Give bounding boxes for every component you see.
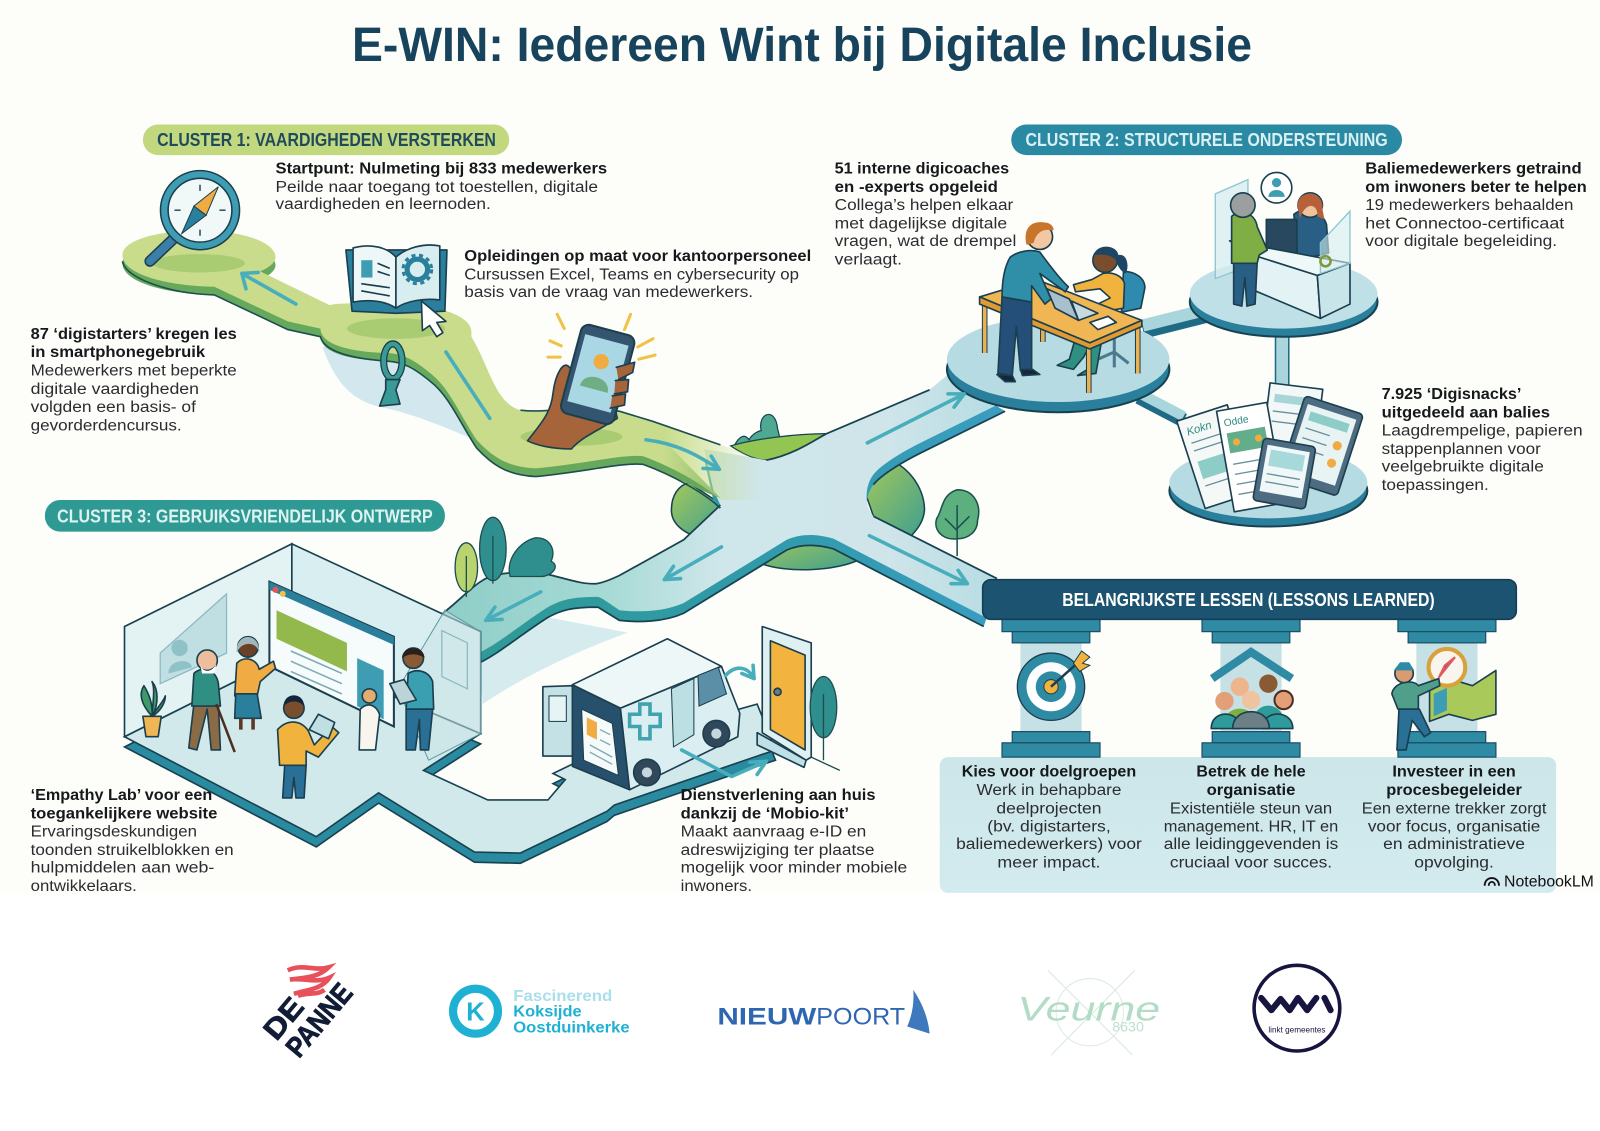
logo: De Panne: DE: [257, 991, 311, 1046]
logo: WVI: [1254, 965, 1340, 1051]
lesson 1 text: meer impact.: [997, 854, 1101, 871]
title: E-WIN: Iedereen Wint bij Digitale Inclusie: [352, 19, 1252, 72]
lesson 1 text: (bv. digistarters,: [987, 819, 1111, 836]
illustration: empathy lab: [125, 544, 776, 863]
illustration: digisnack papers and tablets: Odde: [1223, 414, 1250, 429]
icon: team under roof: [1211, 652, 1293, 729]
lesson 2 text: management. HR, IT en: [1164, 819, 1338, 836]
lesson 1 text: deelprojecten: [996, 800, 1102, 817]
green hills behind the crossroads: [671, 414, 924, 570]
text block: empathy lab: ‘Empathy Lab’ voor een: [31, 787, 212, 804]
cluster 3 heading: [45, 500, 445, 532]
icon: ring knot: [380, 344, 402, 406]
trees near the empathy lab: [455, 517, 555, 597]
text block: empathy lab: Ervaringsdeskundigen: [31, 824, 197, 841]
text block: digistarters: Medewerkers met beperkte: [31, 363, 237, 380]
person: small woman at screen: [359, 689, 380, 750]
cluster 1 heading: [143, 124, 509, 155]
shadow under green road: [322, 347, 500, 451]
text block: baliemedewerkers: het Connectoo-certificaat: [1365, 216, 1565, 233]
text block: digicoaches: vragen, wat de drempel: [835, 233, 1016, 250]
illustration: front door with tree: [757, 627, 840, 770]
text block: mobio-kit: adreswijziging ter plaatse: [681, 842, 875, 859]
website screen: [269, 582, 394, 727]
text block: digisnacks: stappenplannen voor: [1382, 441, 1541, 458]
logo: Nieuwpoort: NIEUW: [717, 1003, 817, 1030]
text block: digicoaches: met dagelijkse digitale: [835, 216, 1007, 233]
text block: digicoaches: [835, 160, 1016, 268]
text block: baliemedewerkers: [1365, 160, 1587, 250]
desk: [980, 280, 1142, 393]
text block: digicoaches: 51 interne digicoaches: [835, 160, 1009, 177]
lesson 1 text: baliemedewerkers) voor: [956, 836, 1142, 853]
lab walls: [125, 544, 481, 760]
text block: opleidingen op maat: Cursussen Excel, Teams en cybersecurity op: [464, 267, 799, 284]
lessons heading bar: [983, 580, 1516, 619]
lesson 3 text: en administratieve: [1383, 836, 1525, 853]
lesson 2 text: Existentiële steun van: [1170, 800, 1332, 817]
text block: opleidingen op maat: Opleidingen op maat voor kantoorpersoneel: [464, 248, 811, 265]
lesson 3 text: opvolging.: [1414, 854, 1494, 871]
icon: guide with compass and map: [1392, 649, 1496, 750]
pillars: [1002, 619, 1496, 757]
text block: baliemedewerkers: voor digitale begeleiding.: [1365, 233, 1557, 250]
text block: digistarters: gevorderdencursus.: [31, 418, 182, 435]
illustration: Mobio-kit van: [543, 639, 766, 790]
background: [0, 0, 1600, 893]
logo: Koksijde Oostduinkerke: Koksijde: [513, 1003, 582, 1020]
platforms: cluster 2: [947, 259, 1378, 527]
lab floor: [125, 653, 776, 863]
lesson 2 text: alle leidinggevenden is: [1164, 836, 1338, 853]
lesson 1 text: [956, 764, 1142, 871]
logo: Nieuwpoort: POORT: [816, 1003, 905, 1030]
icon: compass magnifier: [150, 174, 236, 261]
lesson 3 text: [1362, 764, 1547, 871]
logo: Koksijde Oostduinkerke: K: [466, 998, 485, 1026]
text block: digicoaches: en -experts opgeleid: [835, 179, 998, 196]
text block: startpunt nulmeting: Peilde naar toegang tot toestellen, digitale: [276, 179, 598, 196]
central crossroads road: [443, 369, 1005, 663]
text block: digistarters: 87 ‘digistarters’ kregen les: [31, 326, 237, 343]
person: man with tablet: [390, 648, 434, 750]
lesson 3 text: voor focus, organisatie: [1368, 819, 1541, 836]
logo: Veurne 8630: Veurne: [1017, 990, 1160, 1028]
seated woman: [1057, 247, 1128, 376]
cluster 2 heading: [1011, 124, 1402, 155]
text block: baliemedewerkers: 19 medewerkers behaalden: [1365, 197, 1573, 214]
person: elder with cane: [189, 650, 235, 752]
cluster 3 heading: CLUSTER 3: GEBRUIKSVRIENDELIJK ONTWERP: [57, 505, 433, 526]
text block: digistarters: in smartphonegebruik: [31, 344, 205, 361]
text block: digicoaches: verlaagt.: [835, 251, 902, 268]
text block: digistarters: digitale vaardigheden: [31, 381, 199, 398]
person: woman in yellow: [235, 637, 276, 730]
text block: empathy lab: toegankelijkere website: [31, 805, 218, 822]
logo: De Panne: PANNE: [280, 977, 359, 1064]
lesson 3 text: Investeer in een: [1392, 764, 1516, 781]
logo: Koksijde Oostduinkerke: Fascinerend: [513, 988, 612, 1005]
text block: startpunt nulmeting: Startpunt: Nulmeting bij 833 medewerkers: [276, 160, 607, 177]
text block: digisnacks: veelgebruikte digitale: [1382, 458, 1544, 475]
logo: Veurne 8630: [1017, 970, 1160, 1055]
logo: Koksijde Oostduinkerke: [453, 988, 630, 1037]
lesson 3 text: procesbegeleider: [1386, 782, 1522, 799]
text block: mobio-kit: inwoners.: [681, 878, 752, 895]
text block: empathy lab: hulpmiddelen aan web-: [31, 859, 214, 876]
watermark: NotebookLM: NotebookLM: [1504, 874, 1594, 891]
lesson 1 text: Kies voor doelgroepen: [962, 764, 1136, 781]
text block: digistarters: volgden een basis- of: [31, 399, 197, 416]
text block: digisnacks: uitgedeeld aan balies: [1382, 404, 1550, 421]
cluster 2 heading: CLUSTER 2: STRUCTURELE ONDERSTEUNING: [1026, 129, 1388, 150]
illustration: digisnack papers and tablets: Kokn: [1185, 419, 1213, 439]
lessons text panel: [940, 757, 1556, 893]
text block: digistarters: [31, 326, 237, 435]
cluster 1 heading: CLUSTER 1: VAARDIGHEDEN VERSTERKEN: [157, 129, 496, 150]
plant: [141, 682, 165, 737]
shadow under teal road: [479, 617, 628, 704]
text block: empathy lab: ontwikkelaars.: [31, 878, 137, 895]
green road: cluster 1 path: [122, 231, 766, 508]
panel: lessons learned: [940, 580, 1556, 893]
icon: open book with gear and cursor: [346, 245, 447, 337]
lessons heading bar: BELANGRIJKSTE LESSEN (LESSONS LEARNED): [1062, 589, 1435, 610]
logo: Koksijde Oostduinkerke: Oostduinkerke: [513, 1020, 630, 1037]
text block: empathy lab: [31, 787, 234, 895]
text block: baliemedewerkers: om inwoners beter te helpen: [1365, 179, 1587, 196]
text block: startpunt nulmeting: vaardigheden en leernoden.: [276, 196, 491, 213]
text block: startpunt nulmeting: [276, 160, 607, 213]
text block: digisnacks: Laagdrempelige, papieren: [1382, 423, 1583, 440]
text block: digisnacks: toepassingen.: [1382, 477, 1489, 494]
text block: mobio-kit: mogelijk voor minder mobiele: [681, 859, 907, 876]
text block: baliemedewerkers: Baliemedewerkers getraind: [1365, 160, 1582, 177]
text block: digisnacks: [1382, 386, 1583, 494]
lesson 1 text: Werk in behapbare: [977, 782, 1122, 799]
person: man with laptop: [278, 695, 339, 798]
icon: hand holding phone: [528, 314, 655, 449]
icon: target with arrow: [1017, 651, 1090, 720]
lesson 2 text: organisatie: [1207, 782, 1296, 799]
text block: opleidingen op maat: [464, 248, 811, 301]
text block: mobio-kit: Maakt aanvraag e-ID en: [681, 824, 866, 841]
lesson 2 text: Betrek de hele: [1196, 764, 1306, 781]
text block: mobio-kit: dankzij de ‘Mobio-kit’: [681, 805, 849, 822]
tree beside the crossroads: [936, 490, 979, 556]
text block: mobio-kit: Dienstverlening aan huis: [681, 787, 876, 804]
text block: digicoaches: Collega’s helpen elkaar: [835, 197, 1013, 214]
lesson 2 text: [1164, 764, 1338, 871]
illustration: coach helping colleague at desk: [980, 222, 1145, 393]
illustration: digisnack papers and tablets: [1177, 383, 1363, 512]
logo: Nieuwpoort: [717, 990, 930, 1034]
text block: digisnacks: 7.925 ‘Digisnacks’: [1382, 386, 1521, 403]
logo: WVI: linkt gemeentes: [1268, 1026, 1326, 1035]
text block: mobio-kit: [681, 787, 907, 895]
chair: [1098, 271, 1145, 367]
lesson 2 text: cruciaal voor succes.: [1170, 854, 1332, 871]
lesson 3 text: Een externe trekker zorgt: [1362, 800, 1547, 817]
text block: opleidingen op maat: basis van de vraag van medewerkers.: [464, 284, 753, 301]
illustration: service desk with glass shields: [1215, 172, 1350, 318]
arrows along the route: [242, 272, 967, 815]
logo: Veurne 8630: 8630: [1112, 1020, 1144, 1036]
text block: empathy lab: toonden struikelblokken en: [31, 842, 234, 859]
standing man: [997, 222, 1068, 382]
